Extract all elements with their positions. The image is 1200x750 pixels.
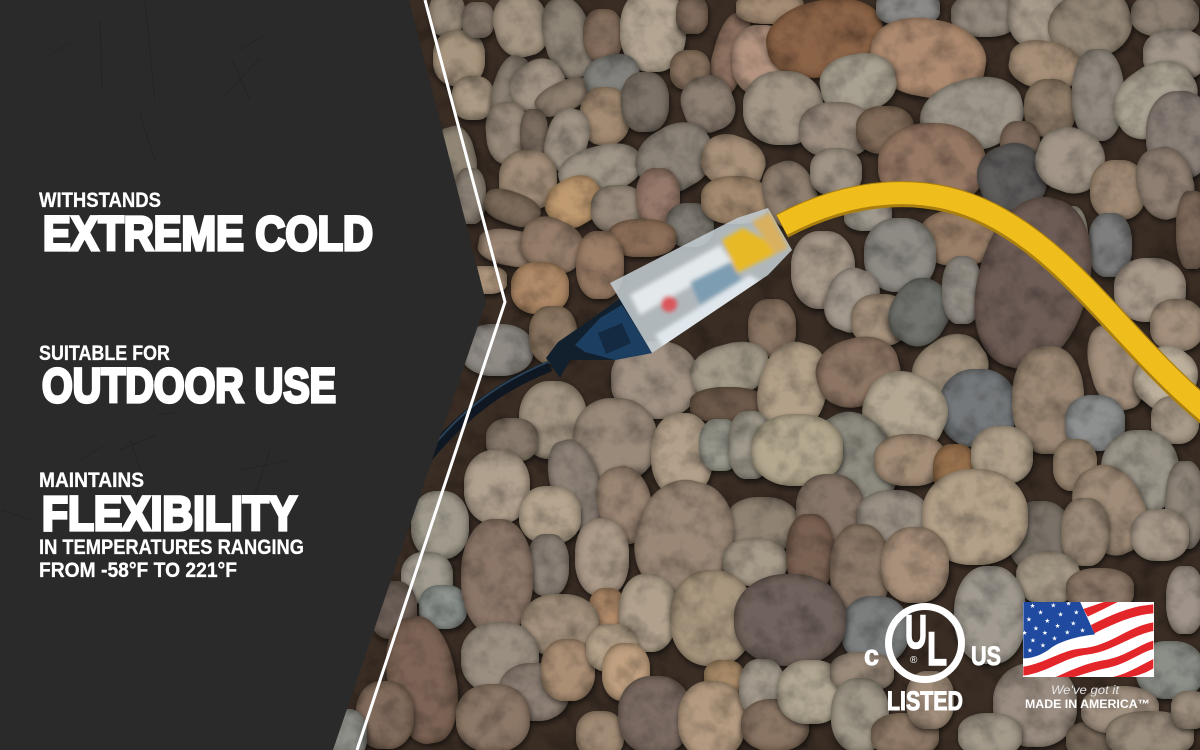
flag stars: ★	[1044, 617, 1050, 625]
flag stars: ★	[1070, 619, 1076, 627]
UL listed logo: c	[864, 640, 879, 672]
flag stars: ★	[1040, 641, 1046, 649]
yellow extension cord	[782, 193, 1200, 415]
flag stars: ★	[1026, 616, 1032, 624]
made in america tagline	[1025, 683, 1150, 711]
UL listed logo: LISTED	[887, 686, 963, 716]
flag stars: ★	[1052, 635, 1058, 643]
made in america tagline: We've got it	[1051, 683, 1120, 697]
flag stars: ★	[1030, 602, 1036, 610]
made in america tagline: MADE IN AMERICA™	[1025, 697, 1150, 711]
white chevron line	[357, 0, 505, 750]
flag stars: ★	[1027, 646, 1033, 654]
flag stars: ★	[1042, 629, 1048, 637]
connector yellow band	[722, 228, 783, 273]
flag stars: ★	[1033, 625, 1039, 633]
feature: flexibility	[39, 468, 304, 582]
feature: extreme cold	[39, 188, 373, 261]
flag stars: ★	[1080, 626, 1086, 634]
flag stars: ★	[1064, 629, 1070, 637]
plug grip	[598, 323, 631, 354]
UL listed logo: ®	[910, 655, 918, 666]
feature: flexibility: MAINTAINS	[39, 468, 144, 492]
connector interior reflections	[630, 212, 788, 350]
flag stars: ★	[1050, 601, 1056, 609]
flag stars: ★	[1030, 636, 1036, 644]
flag stars: ★	[1073, 609, 1079, 617]
feature: extreme cold: EXTREME COLD	[43, 208, 373, 261]
UL listed logo: U	[905, 605, 927, 658]
feature: outdoor use: OUTDOOR USE	[42, 360, 336, 413]
dark angled panel	[0, 0, 486, 750]
feature: flexibility: FROM -58°F TO 221°F	[39, 558, 237, 582]
UL listed logo	[864, 605, 1001, 716]
UL listed logo: L	[927, 622, 947, 675]
flag stars	[1023, 602, 1085, 652]
flag red stripes	[1023, 602, 1153, 678]
translucent lighted connector	[610, 208, 792, 353]
photo: pebbles	[327, 0, 1200, 750]
black power cord	[425, 362, 550, 460]
feature: extreme cold: WITHSTANDS	[39, 188, 161, 212]
flag canton	[1023, 602, 1095, 658]
feature: flexibility: IN TEMPERATURES RANGING	[39, 535, 304, 559]
UL listed logo: US	[971, 641, 1001, 671]
flag stars: ★	[1058, 610, 1064, 618]
black plug body	[546, 297, 652, 378]
feature: outdoor use: SUITABLE FOR	[39, 341, 170, 365]
flag stars: ★	[1055, 622, 1061, 630]
flag stars: ★	[1038, 609, 1044, 617]
red indicator light	[661, 296, 677, 312]
American flag	[1022, 600, 1154, 678]
feature: flexibility: FLEXIBILITY	[42, 488, 297, 541]
flag stars: ★	[1066, 600, 1072, 608]
flag stars: ★	[1022, 629, 1028, 637]
feature: outdoor use	[39, 341, 336, 413]
